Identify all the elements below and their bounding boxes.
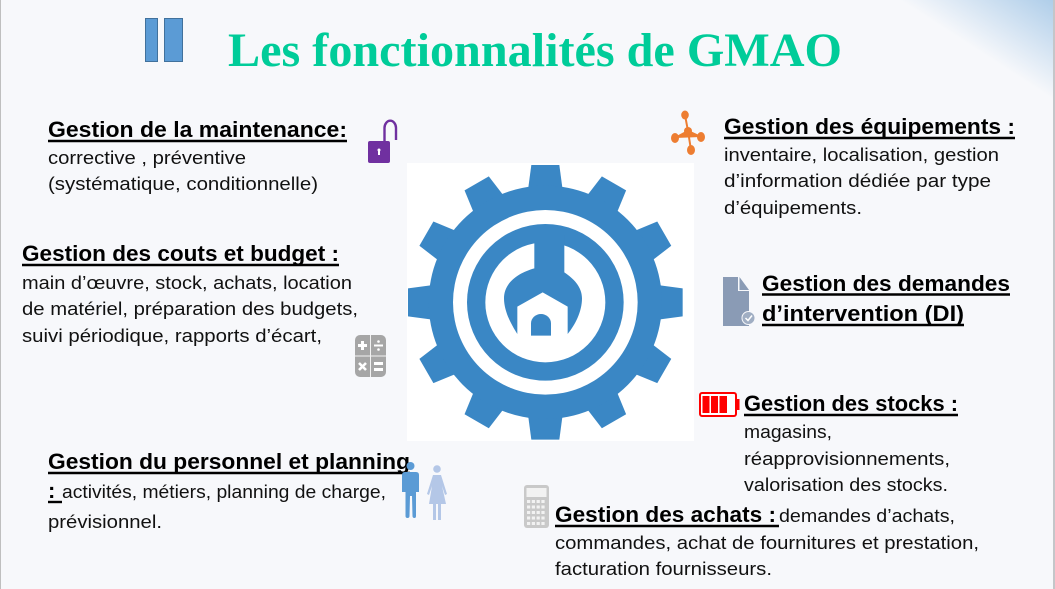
panel: gestion du personnel et planning: :	[48, 478, 55, 503]
panel: gestion des stocks: réapprovisionnements,	[744, 448, 950, 469]
panel: gestion des achats: facturation fournisseurs.	[555, 558, 772, 579]
panel: gestion des équipements	[724, 114, 1015, 218]
panel: gestion des couts et budget: Gestion des couts et budget :	[22, 241, 339, 266]
panel: gestion des demandes d'intervention	[762, 271, 1010, 326]
panel: gestion des stocks	[744, 391, 958, 495]
panel: gestion des couts et budget	[22, 241, 358, 346]
panel: gestion des achats: commandes, achat de fournitures et prestation,	[555, 532, 979, 553]
icon: man and woman	[402, 462, 447, 520]
icon: red battery	[700, 393, 740, 416]
icon: orange network	[671, 110, 705, 155]
panel: gestion des achats: Gestion des achats :	[555, 502, 776, 527]
panel: gestion des équipements: inventaire, localisation, gestion	[724, 144, 999, 165]
panel: gestion de la maintenance	[48, 117, 347, 194]
panel: gestion des couts et budget: suivi périodique, rapports d’écart,	[22, 325, 322, 346]
panel: gestion du personnel et planning	[48, 449, 410, 532]
panel: gestion des achats: demandes d’achats,	[779, 505, 955, 526]
panel: gestion des équipements: d’équipements.	[724, 197, 862, 218]
panel: gestion des achats	[555, 502, 979, 579]
panel: gestion des stocks: Gestion des stocks :	[744, 391, 958, 416]
icon: document with check	[723, 277, 755, 326]
title: Les fonctionnalités de GMAO	[228, 24, 842, 77]
panel: gestion des couts et budget: main d’œuvre, stock, achats, location	[22, 272, 352, 293]
panel: gestion des demandes d'intervention: Gestion des demandes	[762, 271, 1010, 296]
panel: gestion du personnel et planning: Gestion du personnel et planning	[48, 449, 410, 474]
icon: math keypad	[355, 335, 386, 377]
panel: gestion des équipements: d’information dédiée par type	[724, 170, 991, 191]
icon: two blue bars	[146, 18, 182, 62]
panel: gestion des demandes d'intervention: d’intervention (DI)	[762, 301, 964, 326]
icon: open padlock	[368, 121, 396, 163]
icon: grey calculator	[524, 485, 549, 528]
panel: gestion du personnel et planning: activités, métiers, planning de charge,	[62, 481, 386, 502]
panel: gestion du personnel et planning: prévisionnel.	[48, 511, 162, 532]
central gear image	[407, 163, 694, 441]
panel: gestion des couts et budget: de matériel, préparation des budgets,	[22, 298, 358, 319]
panel: gestion de la maintenance: Gestion de la maintenance:	[48, 117, 347, 142]
panel: gestion des équipements: Gestion des équipements :	[724, 114, 1015, 139]
panel: gestion de la maintenance: (systématique, conditionnelle)	[48, 173, 318, 194]
panel: gestion de la maintenance: corrective , préventive	[48, 147, 246, 168]
panel: gestion des stocks: magasins,	[744, 421, 832, 442]
panel: gestion des stocks: valorisation des stocks.	[744, 474, 948, 495]
